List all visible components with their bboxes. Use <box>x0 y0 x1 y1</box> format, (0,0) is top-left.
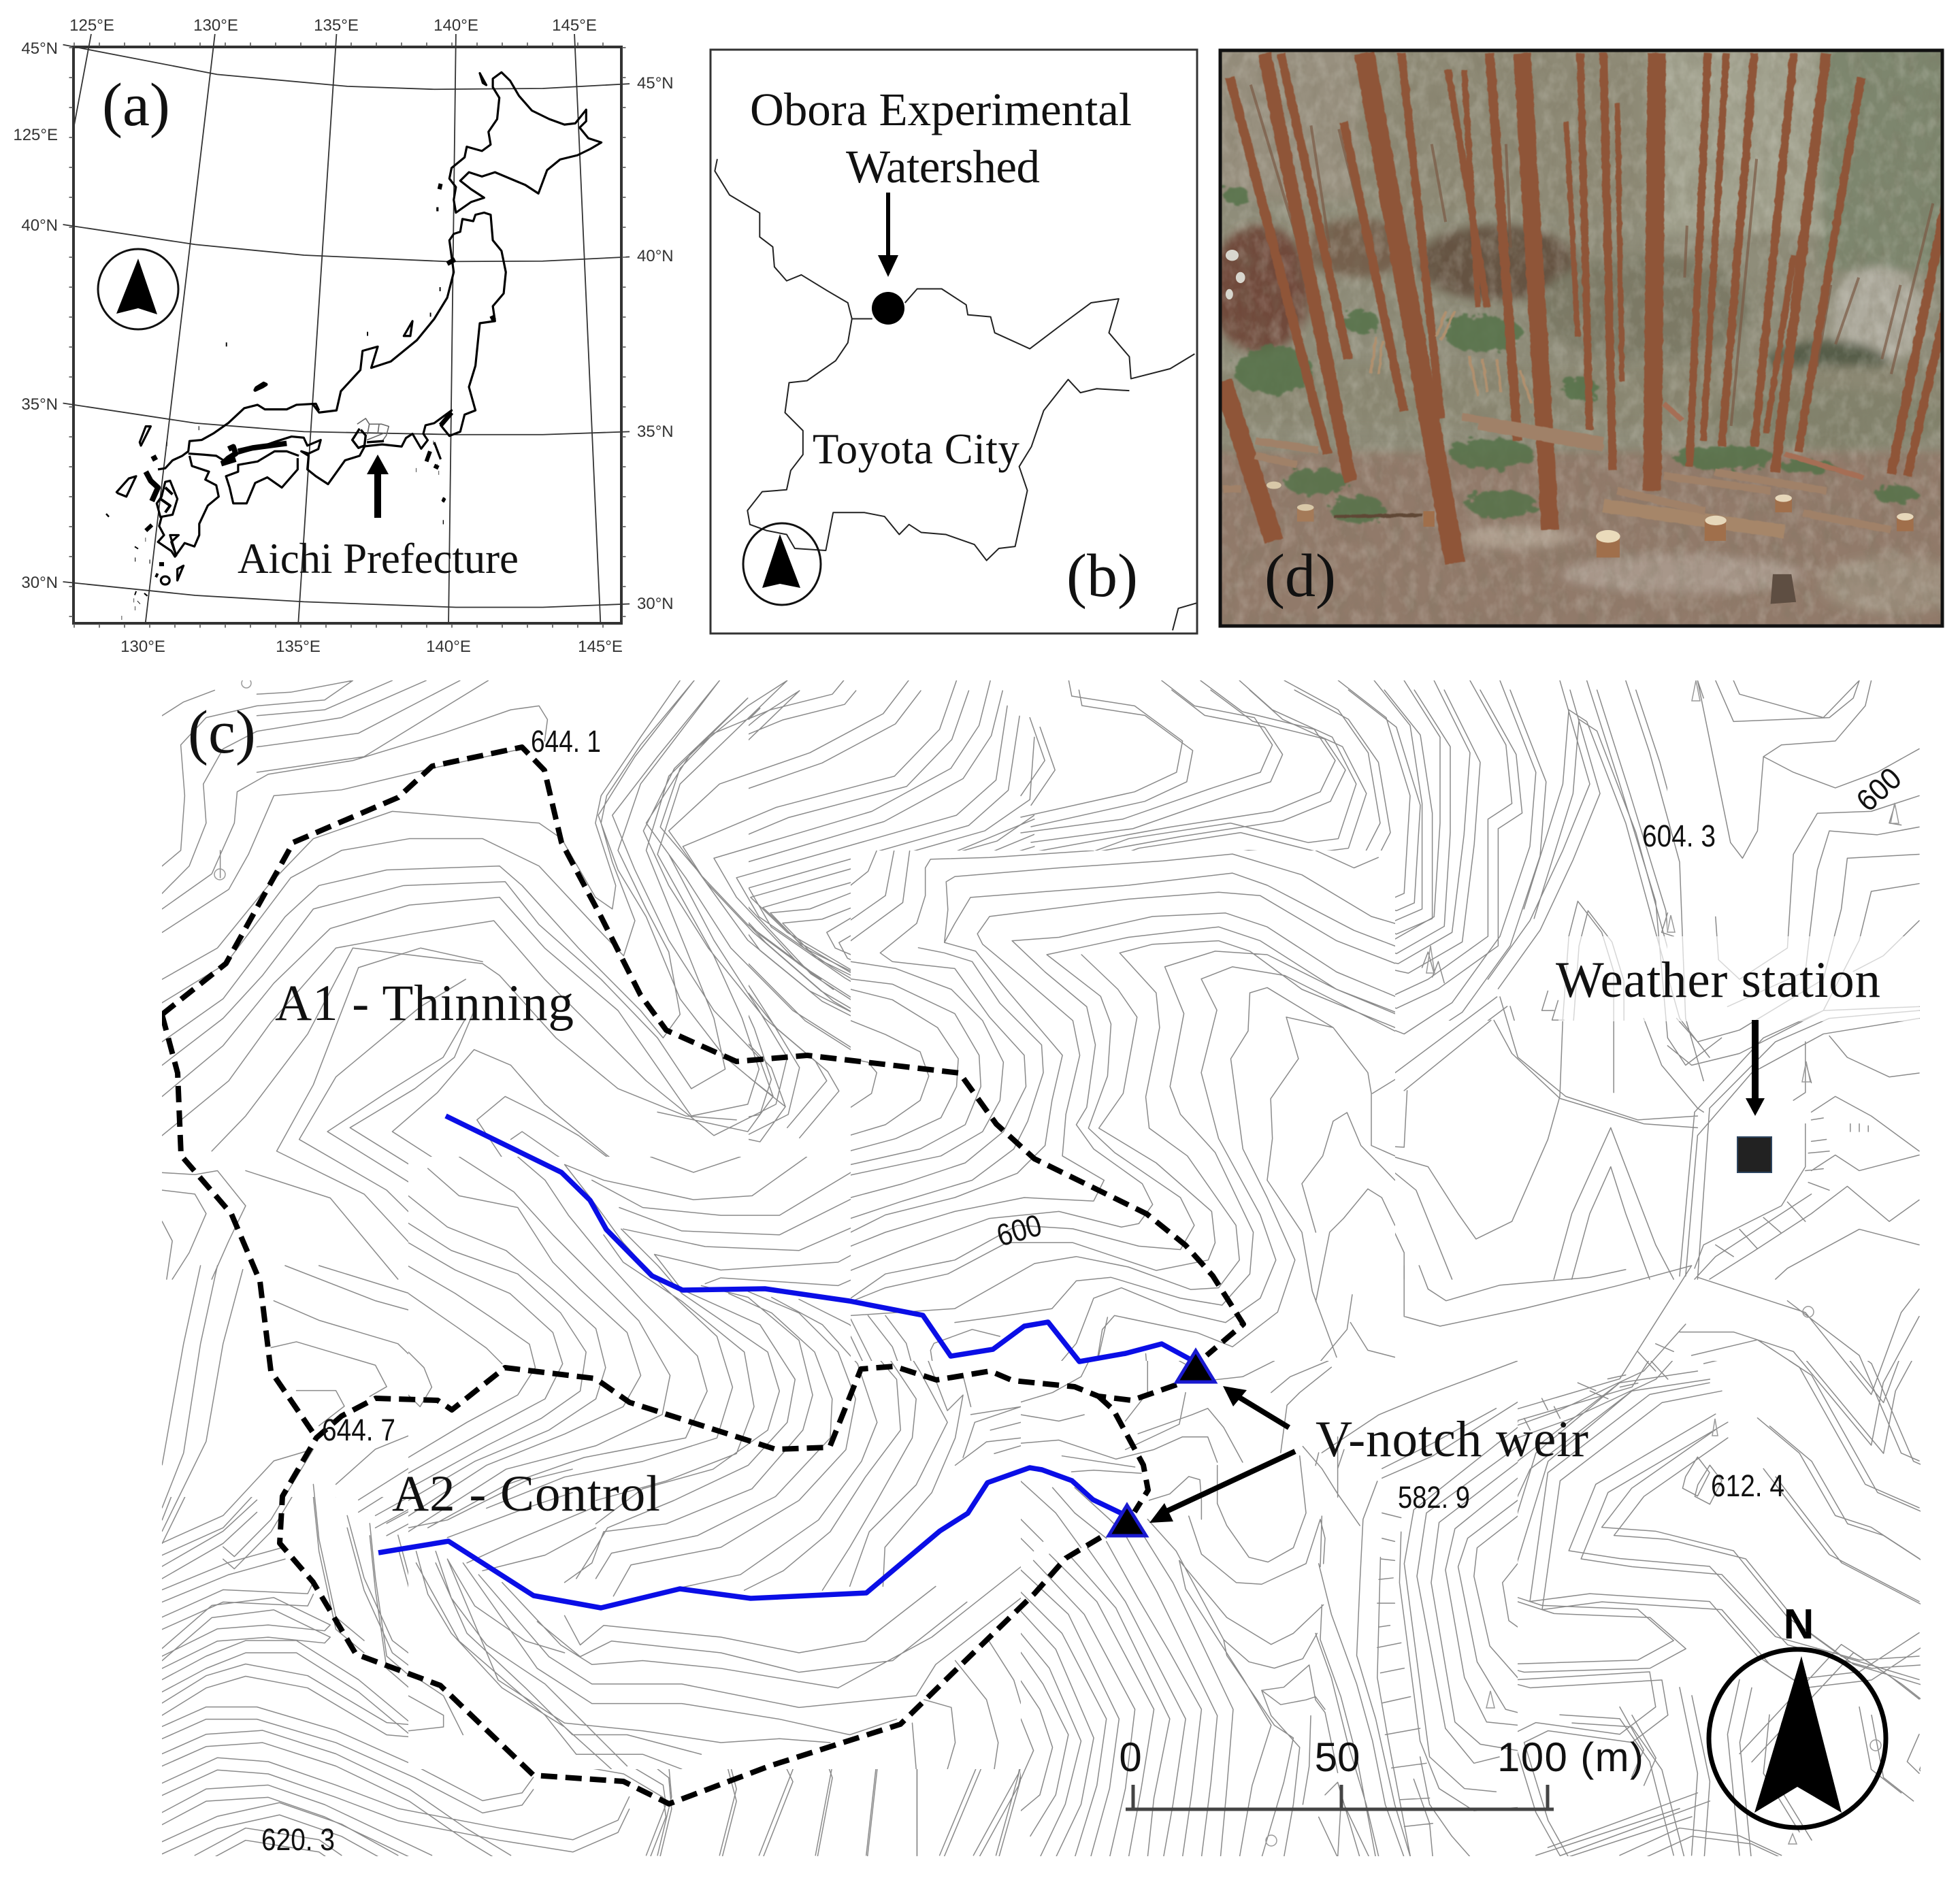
elevation labels: 612. 4 <box>1711 1468 1784 1503</box>
felled logs <box>1223 311 1891 531</box>
label: Toyota City: Toyota City <box>813 425 1019 473</box>
arrow: to weather station <box>1746 1020 1765 1116</box>
frame <box>710 50 1197 633</box>
frame <box>1220 50 1942 626</box>
elevation labels: 604. 3 <box>1642 819 1716 853</box>
panel (c): contour map of the experimental catchments <box>162 678 1931 1868</box>
panel label (c): (c) <box>188 699 256 766</box>
elevation labels: 620. 3 <box>261 1822 335 1857</box>
stream in A1: blue line <box>446 1116 1194 1362</box>
elevation labels: 600 <box>993 1207 1045 1253</box>
longitude and latitude labels: 125°E <box>13 126 58 144</box>
elevation labels <box>261 724 1908 1857</box>
map frame <box>74 47 621 623</box>
stream in A2: blue line <box>378 1468 1126 1608</box>
arrow: points to watershed <box>878 193 898 277</box>
panel label (b): (b) <box>1066 542 1138 610</box>
catchment boundary A2: dashed <box>280 1366 1177 1804</box>
longitude and latitude labels: 140°E <box>426 638 471 656</box>
icon: V-notch weir A1 <box>1177 1351 1215 1382</box>
icon: north compass: N <box>1784 1601 1814 1648</box>
label: V-notch weir: V-notch weir <box>1316 1411 1588 1468</box>
icon: V-notch weir A2 <box>1109 1505 1146 1536</box>
catchment boundary A1: dashed <box>162 747 1243 1438</box>
scale bar: 0 <box>1119 1734 1142 1780</box>
longitude and latitude labels: 125°E <box>69 16 114 35</box>
longitude and latitude labels: 30°N <box>21 574 58 592</box>
graticule lines <box>63 34 630 623</box>
scale bar: 50 <box>1315 1734 1360 1780</box>
photo texture <box>1220 50 1942 626</box>
longitude and latitude labels: 40°N <box>637 247 674 265</box>
tree trunks <box>1223 53 1946 563</box>
panel label (a): (a) <box>102 71 170 139</box>
contours: dense slopes around both streams <box>408 1157 1021 1769</box>
longitude and latitude labels: 45°N <box>637 74 674 93</box>
icon: north arrow <box>743 523 821 605</box>
marker: watershed location <box>872 292 904 325</box>
elevation labels: 644. 7 <box>322 1413 395 1447</box>
haze behind Weather station label <box>1558 936 1919 1021</box>
arrow: points to Aichi <box>367 455 389 518</box>
contours: density infill for outer regions <box>162 690 1931 1868</box>
longitude and latitude labels: 135°E <box>276 638 321 656</box>
label: Obora Experimental Watershed: Obora Experimental <box>750 84 1132 135</box>
Aichi Prefecture outline <box>357 418 389 442</box>
label: Obora Experimental Watershed: Watershed <box>846 141 1040 193</box>
contours: outer regions traced coarsely <box>162 680 1919 1856</box>
contours: centre valley north of the weirs <box>851 851 1395 1395</box>
elevation labels: 644. 1 <box>531 724 601 759</box>
longitude and latitude labels: 135°E <box>314 16 359 35</box>
longitude and latitude labels: 130°E <box>193 16 238 35</box>
label: A1 - Thinning: A1 - Thinning <box>275 975 574 1032</box>
longitude and latitude labels: 140°E <box>434 16 478 35</box>
panel (d): forest photograph <box>1209 40 1960 638</box>
elevation labels: 600 <box>1850 761 1908 818</box>
contours: south of weirs to scale bar <box>1021 1361 1518 1858</box>
longitude and latitude labels: 145°E <box>578 638 623 656</box>
photo contents <box>1209 40 1960 638</box>
arrow: to weir A2 <box>1149 1451 1295 1523</box>
pale objects at left edge <box>1226 250 1245 299</box>
icon: north arrow <box>98 249 178 329</box>
label: Aichi Prefecture: Aichi Prefecture <box>238 535 519 582</box>
elevation labels: 582. 9 <box>1398 1480 1470 1515</box>
green undergrowth <box>1224 186 1916 523</box>
label: Obora Experimental Watershed <box>750 84 1132 193</box>
label: Weather station: Weather station <box>1556 952 1880 1008</box>
longitude and latitude labels: 35°N <box>21 395 58 414</box>
longitude and latitude labels: 130°E <box>120 638 165 656</box>
arrow: to weir A1 <box>1223 1386 1289 1428</box>
label: A2 - Control: A2 - Control <box>392 1466 660 1522</box>
scale bar <box>1119 1734 1644 1809</box>
Toyota City boundary <box>715 159 1196 630</box>
longitude and latitude labels: 35°N <box>637 423 674 441</box>
small map symbols <box>214 678 1899 1846</box>
icon: north compass <box>1709 1601 1886 1828</box>
distant thin trunks <box>1251 84 1933 426</box>
longitude and latitude labels: 40°N <box>21 216 58 235</box>
Japan coastline <box>107 72 602 618</box>
marker: weather station <box>1737 1137 1771 1172</box>
tree stumps <box>1267 482 1914 604</box>
panel (a): map of Japan <box>13 16 674 656</box>
frame tick marks <box>71 44 624 626</box>
scale bar: 100 (m) <box>1497 1734 1644 1780</box>
longitude and latitude labels <box>13 16 674 656</box>
panel label (d): (d) <box>1264 542 1336 610</box>
panel (b): Toyota City map <box>710 50 1197 633</box>
longitude and latitude labels: 30°N <box>637 595 674 613</box>
longitude and latitude labels: 145°E <box>552 16 597 35</box>
longitude and latitude labels: 45°N <box>21 39 58 58</box>
